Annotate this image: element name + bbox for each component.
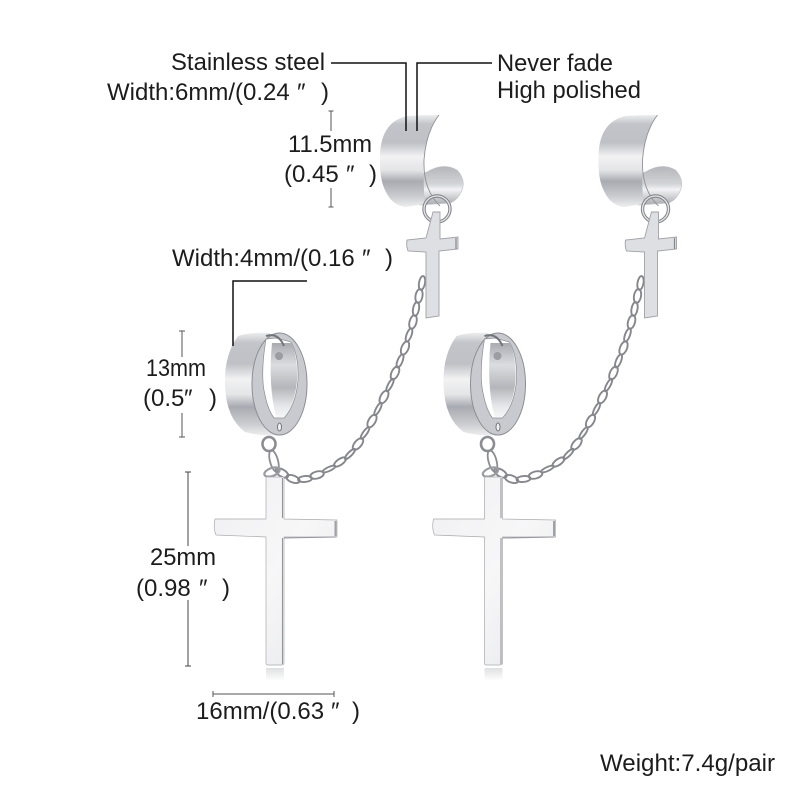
label: weight: Weight:7.4g/pair	[600, 750, 775, 777]
label: width 4mm: Width:4mm/(0.16	[172, 245, 355, 272]
small jump ring	[424, 196, 450, 222]
label: 0.45 inch: ″	[346, 161, 355, 188]
label: 0.5 inch: )	[209, 385, 217, 412]
label: 16mm: ″	[331, 698, 340, 725]
leader line: width 4mm	[233, 281, 307, 346]
label: 0.5 inch: ″	[184, 385, 193, 412]
cross reflection	[266, 668, 284, 681]
label: 16mm: 16mm/(0.63	[196, 698, 324, 725]
small cuff tail	[418, 166, 463, 205]
label: width 6mm: Width:6mm/(0.24	[107, 79, 290, 106]
label: never fade: Never fade	[497, 50, 613, 77]
hoop opening	[263, 338, 298, 418]
label: width 4mm: )	[385, 245, 393, 272]
label: 0.98 inch: )	[222, 575, 230, 602]
label: 0.98 inch: ″	[199, 575, 208, 602]
dimension: 25mm bracket	[185, 472, 191, 666]
label: width 6mm: ″	[297, 79, 306, 106]
large cross	[214, 477, 337, 665]
earring: right pair piece	[433, 115, 682, 681]
dimension: 13mm bracket	[179, 331, 185, 437]
label: width 6mm: )	[321, 79, 329, 106]
chain	[274, 276, 426, 485]
label: stainless steel: Stainless steel	[171, 49, 325, 76]
dimension: 11.5mm bracket	[328, 111, 334, 207]
hoop jump ring	[262, 437, 281, 478]
label: 11.5mm: 11.5mm	[288, 131, 372, 158]
leader line: stainless steel	[331, 63, 406, 131]
hoop earring	[225, 333, 307, 436]
label: 0.98 inch: (0.98	[136, 575, 191, 602]
earring: left pair piece	[214, 115, 463, 681]
label: high polished: High polished	[497, 77, 641, 104]
dimension: 16mm bracket	[213, 691, 334, 697]
label: 0.5 inch: (0.5	[143, 385, 184, 412]
label: 16mm: )	[352, 698, 360, 725]
label: 0.45 inch: )	[369, 161, 377, 188]
label: 13mm: 13mm	[146, 355, 206, 382]
label: 25mm: 25mm	[150, 544, 216, 571]
leader line: never fade	[417, 63, 492, 131]
small cross	[407, 212, 458, 318]
ear cuff band	[380, 115, 439, 207]
label: 0.45 inch: (0.45	[284, 161, 339, 188]
label: width 4mm: ″	[362, 245, 371, 272]
